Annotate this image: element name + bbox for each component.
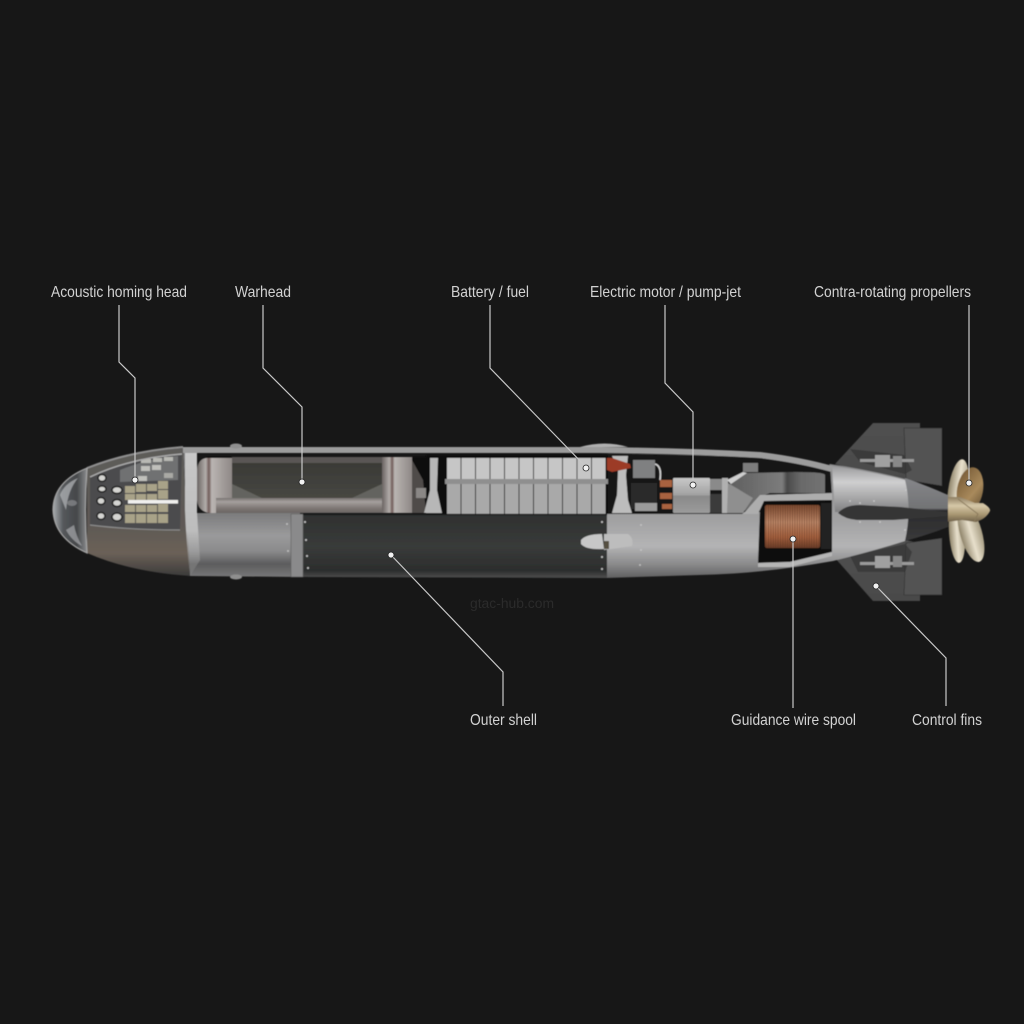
transducer grid [125, 481, 168, 523]
rivets [286, 489, 907, 570]
callout: control fins [873, 583, 982, 729]
callout: control fins: Control fins [912, 712, 982, 729]
control fin: lower [835, 538, 942, 601]
callout: acoustic homing head [51, 284, 187, 483]
callout: electric motor / pump-jet [590, 284, 741, 488]
hull top rim [183, 450, 832, 469]
callout: outer shell [388, 552, 537, 729]
hull: dark mid section [303, 515, 607, 578]
control box [633, 460, 655, 478]
side strake [838, 505, 947, 520]
electronics [631, 483, 657, 509]
bulkhead [612, 456, 632, 513]
wire spool bay [758, 500, 832, 567]
duct strut [727, 472, 747, 484]
hull: rear silver section [607, 464, 908, 578]
lower stator [727, 483, 753, 513]
control fin: upper [835, 423, 942, 486]
front lugs [230, 444, 242, 580]
watermark: gtac-hub.com [470, 596, 554, 611]
panel: torpedo cutaway [53, 423, 990, 601]
seam band [291, 514, 303, 577]
pump-jet duct [730, 472, 825, 511]
sensor window [90, 454, 182, 530]
callout: acoustic homing head: Acoustic homing head [51, 284, 187, 301]
copper windings [660, 480, 672, 509]
red connector [607, 458, 631, 472]
side lug [581, 534, 632, 550]
cutaway: motor bay [607, 454, 832, 514]
hull highlight: tail shoulder [832, 466, 908, 512]
battery cells [447, 458, 606, 479]
callout: battery / fuel: Battery / fuel [451, 284, 529, 301]
shaft collar [722, 478, 728, 513]
shoulder strip between duct and spool [743, 493, 832, 514]
motor shaft [710, 479, 722, 490]
tail cone [905, 478, 948, 541]
collar ring [185, 447, 200, 576]
callout: contra-rotating propellers: Contra-rotating propellers [814, 284, 971, 301]
hull: front silver section [183, 447, 303, 577]
callout: warhead: Warhead [235, 284, 291, 301]
motor body [673, 478, 710, 513]
cutaway: battery bay [424, 455, 611, 514]
callout: guidance wire spool [731, 536, 856, 729]
callout: contra-rotating propellers [814, 284, 972, 486]
cutaway: warhead bay [197, 457, 428, 513]
copper coil [765, 505, 820, 548]
warhead explosive fill [232, 463, 382, 498]
callout: guidance wire spool: Guidance wire spool [731, 712, 856, 729]
duct mount [743, 463, 758, 472]
callout: electric motor / pump-jet: Electric motor / pump-jet [590, 284, 741, 301]
propeller blades [944, 458, 990, 565]
callout: warhead [235, 284, 305, 485]
hull: head lower section [87, 448, 190, 576]
glass nose dome [53, 468, 87, 553]
sensor dots [97, 474, 122, 521]
callout: battery / fuel [451, 284, 589, 471]
hull rim: head top [87, 447, 183, 468]
callout: outer shell: Outer shell [470, 712, 537, 729]
top fairing [580, 444, 628, 447]
